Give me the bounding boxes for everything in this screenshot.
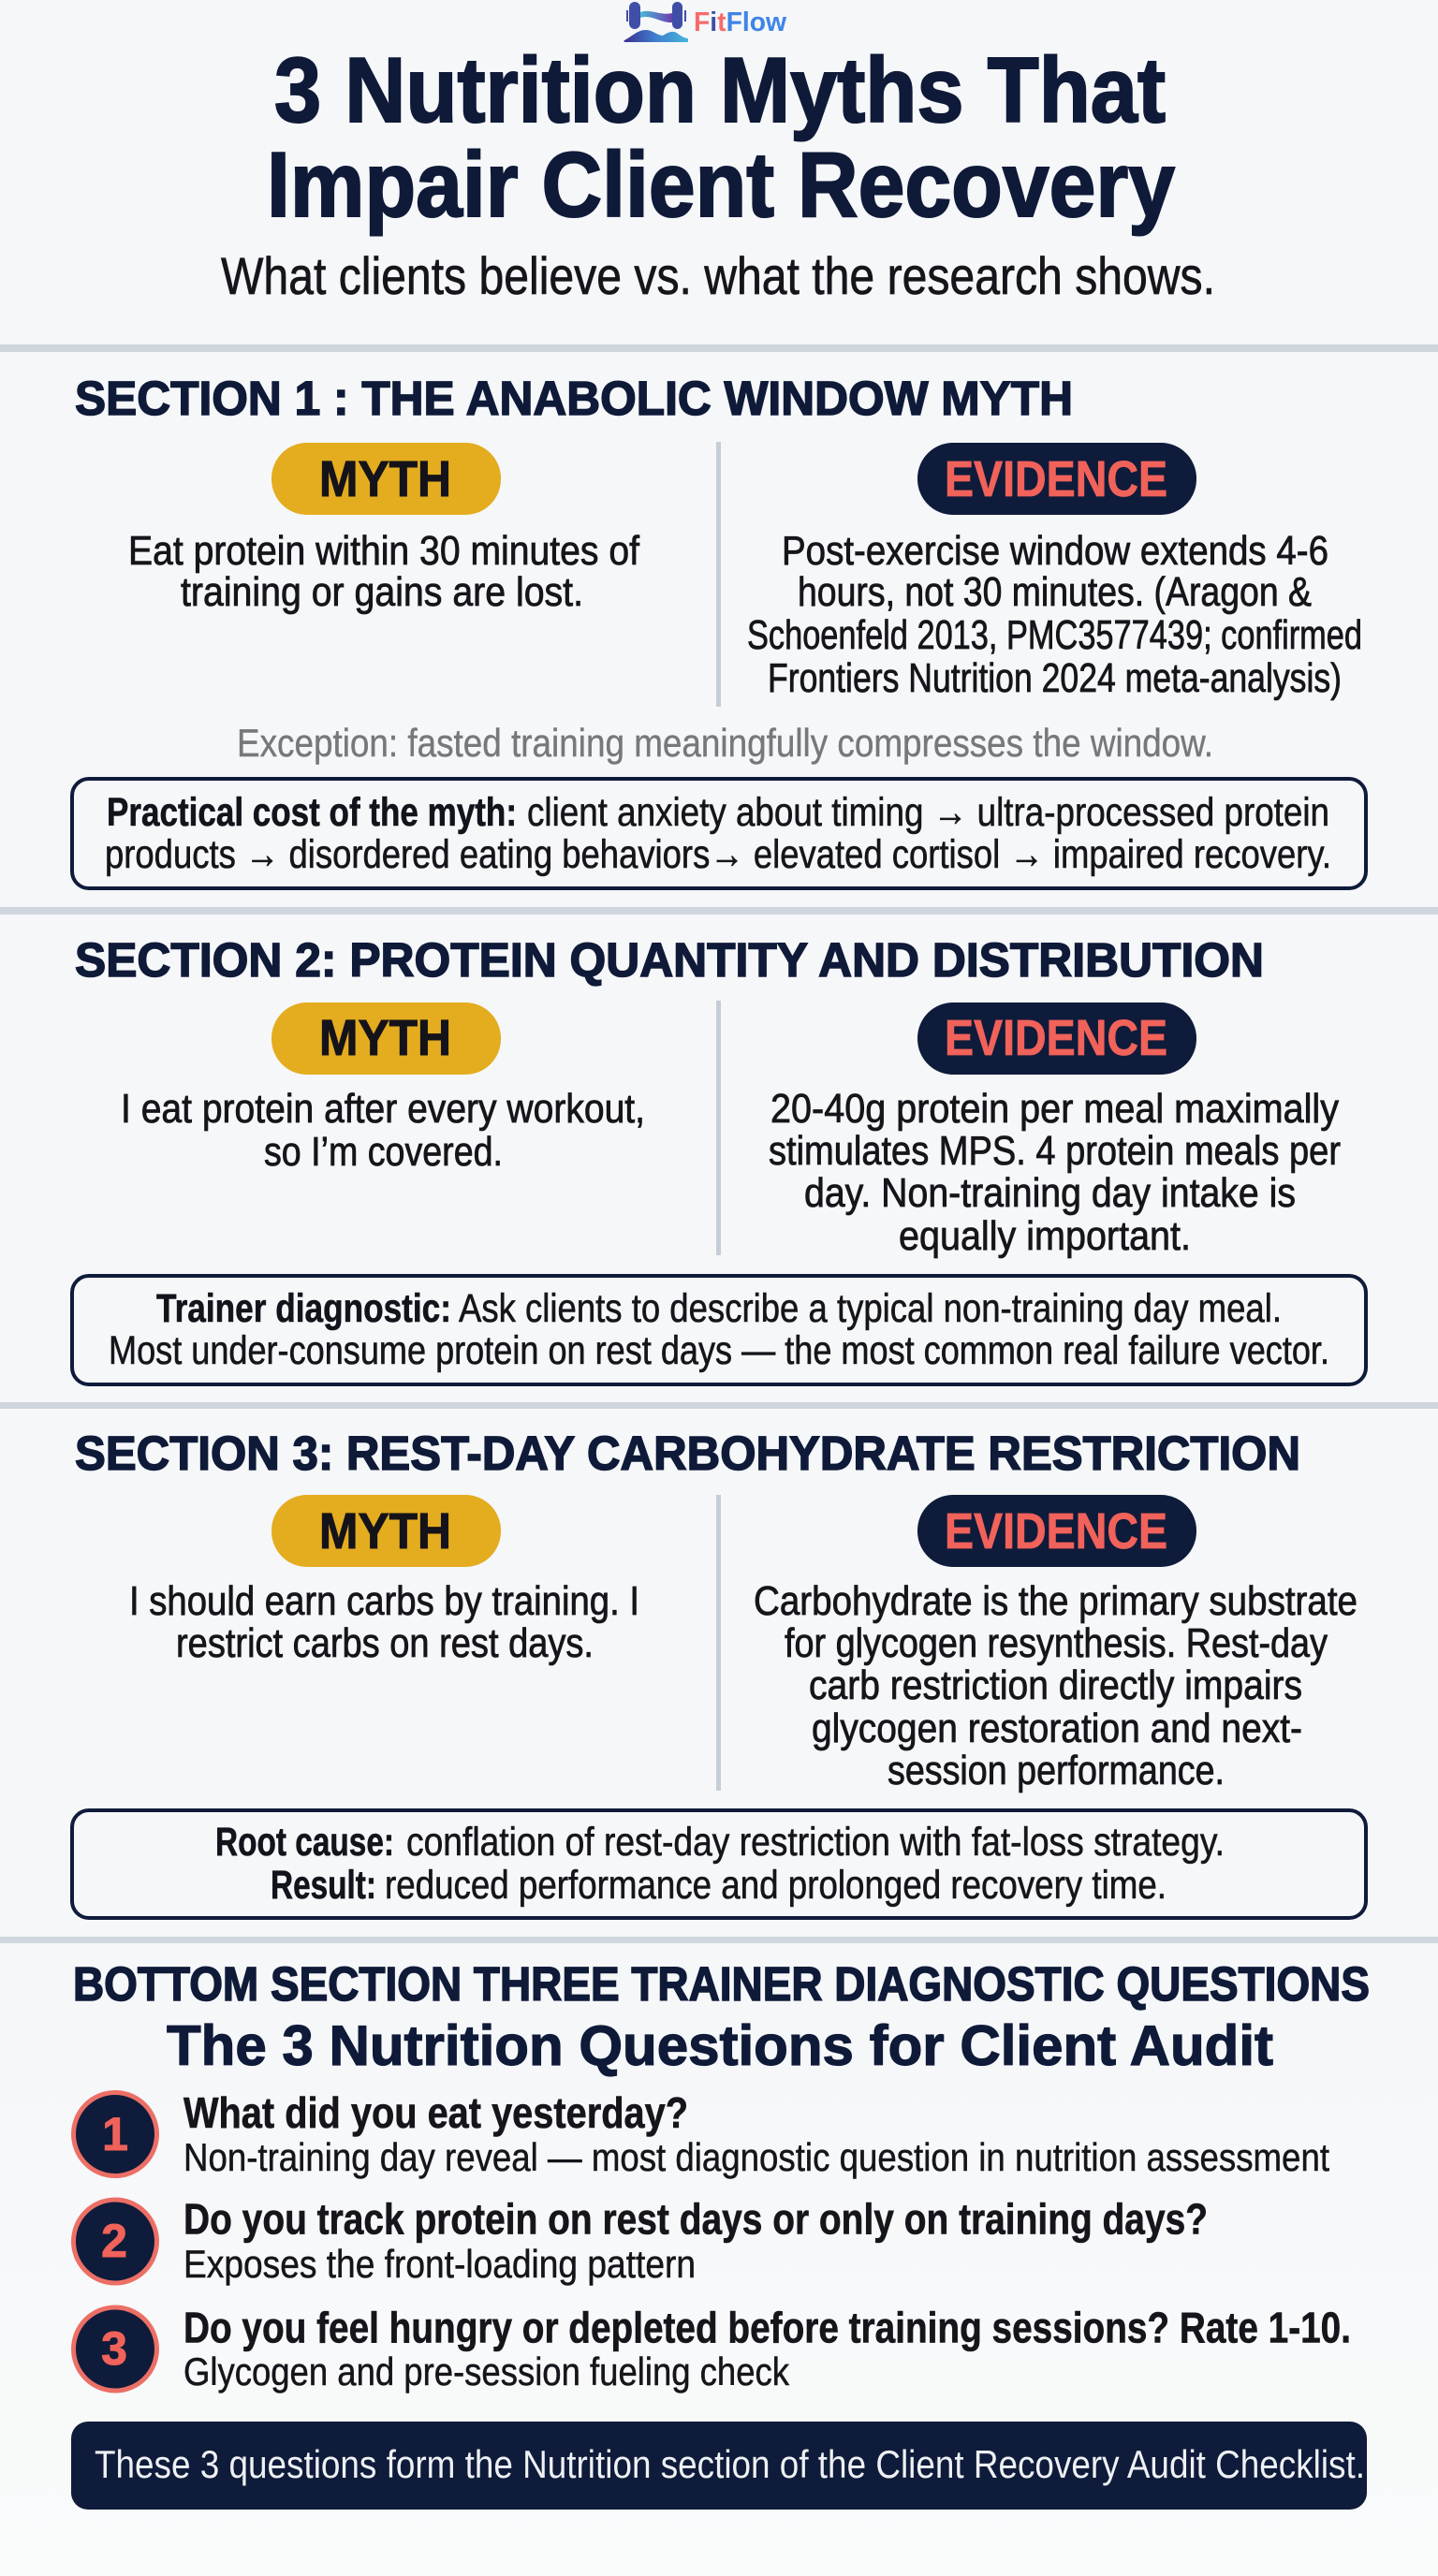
callout: root cause: reduced performance and prolonged recovery time.: [385, 1863, 1167, 1908]
questions heading: The 3 Nutrition Questions for Client Audit: [167, 2014, 1273, 2077]
evidence badge: [917, 443, 1196, 515]
evidence text: Post-exercise window extends 4-6: [782, 528, 1328, 574]
evidence text: hours, not 30 minutes. (Aragon &: [798, 569, 1312, 615]
title: [267, 38, 1175, 236]
evidence badge: EVIDENCE: [945, 1010, 1167, 1066]
evidence text: [769, 1086, 1341, 1259]
question 2: [73, 2194, 1208, 2286]
myth text: restrict carbs on rest days.: [176, 1620, 594, 1666]
section 2 heading: SECTION 2: PROTEIN QUANTITY AND DISTRIBUTION: [75, 933, 1264, 987]
evidence text: 20-40g protein per meal maximally: [770, 1086, 1339, 1132]
myth text: [128, 528, 640, 615]
exception note: Exception: fasted training meaningfully compresses the window.: [237, 721, 1213, 765]
evidence badge: EVIDENCE: [945, 451, 1167, 507]
callout: trainer diagnostic: [72, 1276, 1366, 1384]
evidence badge: [917, 1003, 1196, 1075]
evidence text: [747, 528, 1362, 701]
callout: practical cost: client anxiety about timing → ultra-processed protein: [527, 790, 1329, 835]
section 3 heading: SECTION 3: REST-DAY CARBOHYDRATE RESTRICTION: [75, 1427, 1300, 1480]
myth badge: [271, 1003, 501, 1075]
number badge 1: [73, 2093, 157, 2175]
callout: root cause: Result:: [271, 1863, 376, 1908]
callout: root cause: conflation of rest-day restriction with fat-loss strategy.: [406, 1820, 1225, 1865]
question 1: [73, 2088, 1329, 2179]
callout: practical cost: [72, 779, 1366, 888]
evidence text: [754, 1578, 1357, 1793]
callout: root cause: Root cause:: [215, 1820, 394, 1865]
panel: section 2 protein quantity and distribution: [72, 933, 1366, 1384]
evidence badge: [917, 1495, 1196, 1567]
myth text: [129, 1578, 639, 1666]
panel: bottom section diagnostic questions: [71, 1957, 1370, 2510]
icon: FitFlow dumbbell logo: [624, 2, 688, 42]
panel: section 1 anabolic window myth: [72, 372, 1366, 888]
footer banner: [71, 2422, 1367, 2510]
myth badge: MYTH: [319, 1010, 451, 1066]
question 3: Glycogen and pre-session fueling check: [183, 2349, 790, 2393]
logo wordmark: FitFlow: [694, 7, 786, 37]
myth text: I should earn carbs by training. I: [129, 1578, 639, 1624]
evidence text: carb restriction directly impairs: [809, 1662, 1302, 1708]
section 1 heading: SECTION 1 : THE ANABOLIC WINDOW MYTH: [75, 372, 1073, 425]
callout: practical cost: Practical cost of the myth:: [107, 790, 517, 835]
callout: trainer diagnostic: Trainer diagnostic:: [156, 1286, 451, 1331]
myth badge: [271, 1495, 501, 1567]
evidence text: Carbohydrate is the primary substrate: [754, 1578, 1357, 1624]
evidence badge: EVIDENCE: [945, 1503, 1167, 1559]
myth text: I eat protein after every workout,: [121, 1086, 645, 1132]
evidence text: equally important.: [899, 1213, 1191, 1259]
myth text: [121, 1086, 645, 1175]
question 2: Do you track protein on rest days or only on training days?: [183, 2194, 1208, 2243]
number badge 3: [73, 2307, 157, 2391]
myth badge: [271, 443, 501, 515]
evidence text: for glycogen resynthesis. Rest-day: [785, 1620, 1328, 1666]
evidence text: glycogen restoration and next-: [812, 1705, 1302, 1751]
question 2: Exposes the front-loading pattern: [183, 2242, 696, 2286]
myth badge: MYTH: [319, 451, 451, 507]
myth text: training or gains are lost.: [181, 569, 583, 615]
title: 3 Nutrition Myths That: [274, 38, 1166, 141]
number badge 2: 2: [101, 2215, 127, 2267]
panel: section 3 rest-day carbohydrate restriction: [72, 1427, 1366, 1918]
callout: root cause: [72, 1810, 1366, 1918]
question 1: What did you eat yesterday?: [183, 2088, 688, 2137]
subtitle: What clients believe vs. what the research shows.: [221, 246, 1215, 305]
evidence text: session performance.: [888, 1748, 1225, 1793]
number badge 3: 3: [101, 2322, 127, 2375]
header: [221, 2, 1215, 305]
title: Impair Client Recovery: [267, 133, 1175, 236]
question 3: [73, 2303, 1351, 2393]
myth badge: MYTH: [319, 1503, 451, 1559]
myth text: Eat protein within 30 minutes of: [128, 528, 640, 574]
callout: trainer diagnostic: Ask clients to describe a typical non-training day meal.: [459, 1286, 1282, 1331]
number badge 1: 1: [102, 2108, 128, 2160]
evidence text: day. Non-training day intake is: [804, 1170, 1296, 1216]
myth text: so I’m covered.: [264, 1129, 503, 1175]
evidence text: stimulates MPS. 4 protein meals per: [769, 1128, 1341, 1174]
number badge 2: [73, 2200, 157, 2283]
